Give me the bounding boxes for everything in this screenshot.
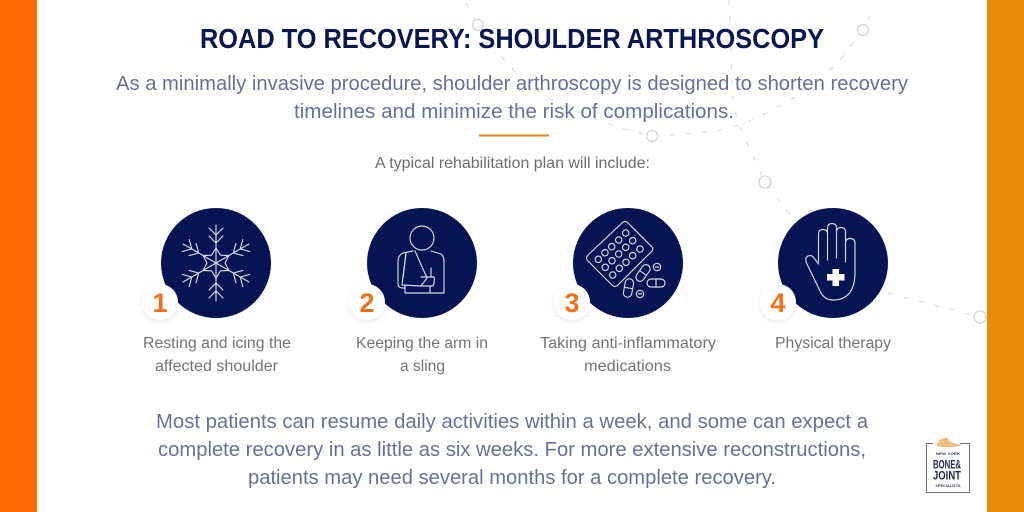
logo: New York Bone and Joint Specialists: NEW YORK: [936, 451, 960, 456]
number badge 4: 4: [770, 288, 786, 318]
number badge 2: [349, 284, 385, 320]
logo: New York Bone and Joint Specialists: [926, 438, 970, 492]
icon: snowflake in navy circle: [161, 208, 271, 318]
number badge 3: [554, 284, 590, 320]
caption 2: [356, 335, 488, 375]
caption 1: Resting and icing the: [143, 335, 291, 352]
caption 2: a sling: [400, 358, 445, 375]
caption 1: [143, 335, 291, 375]
right amber band: [987, 0, 1024, 512]
number badge 2: 2: [359, 288, 375, 318]
caption 3: [540, 335, 716, 375]
icon: person with sling in navy circle: [367, 208, 477, 318]
intro text: [116, 73, 908, 123]
closing paragraph: [156, 411, 869, 489]
title: ROAD TO RECOVERY: SHOULDER ARTHROSCOPY: [200, 23, 824, 54]
step 1: resting and icing: [142, 208, 291, 375]
caption 1: affected shoulder: [155, 358, 278, 375]
caption 4: Physical therapy: [775, 335, 891, 352]
closing paragraph: patients may need several months for a complete recovery.: [248, 467, 776, 489]
icon: hand with cross in navy circle: [778, 208, 888, 318]
number badge 4: [760, 284, 796, 320]
cross: [827, 269, 844, 286]
logo: New York Bone and Joint Specialists: SPECIALISTS: [936, 484, 961, 488]
left orange band: [0, 0, 37, 512]
icon: blister pack and pills in navy circle: [573, 208, 683, 318]
caption 2: Keeping the arm in: [356, 335, 488, 352]
caption 3: Taking anti-inflammatory: [540, 335, 716, 352]
orange divider: [479, 134, 549, 136]
intro text: timelines and minimize the risk of complications.: [294, 101, 734, 123]
step 2: arm sling: [349, 208, 488, 375]
closing paragraph: Most patients can resume daily activities within a week, and some can expect a: [156, 411, 869, 433]
caption 3: medications: [584, 358, 671, 375]
intro text: As a minimally invasive procedure, shoulder arthroscopy is designed to shorten recovery: [116, 73, 908, 95]
rehabilitation plan lead-in: A typical rehabilitation plan will include:: [375, 155, 650, 172]
number badge 3: 3: [564, 288, 580, 318]
step 3: medications: [540, 208, 716, 375]
number badge 1: 1: [152, 288, 168, 318]
logo: New York Bone and Joint Specialists: BONE&: [933, 460, 961, 472]
step 4: physical therapy: [760, 208, 891, 352]
logo: New York Bone and Joint Specialists: JOINT: [933, 470, 961, 482]
number badge 1: [142, 284, 178, 320]
dotted network background: [466, 0, 986, 323]
closing paragraph: complete recovery in as little as six weeks. For more extensive reconstructions,: [158, 439, 866, 461]
